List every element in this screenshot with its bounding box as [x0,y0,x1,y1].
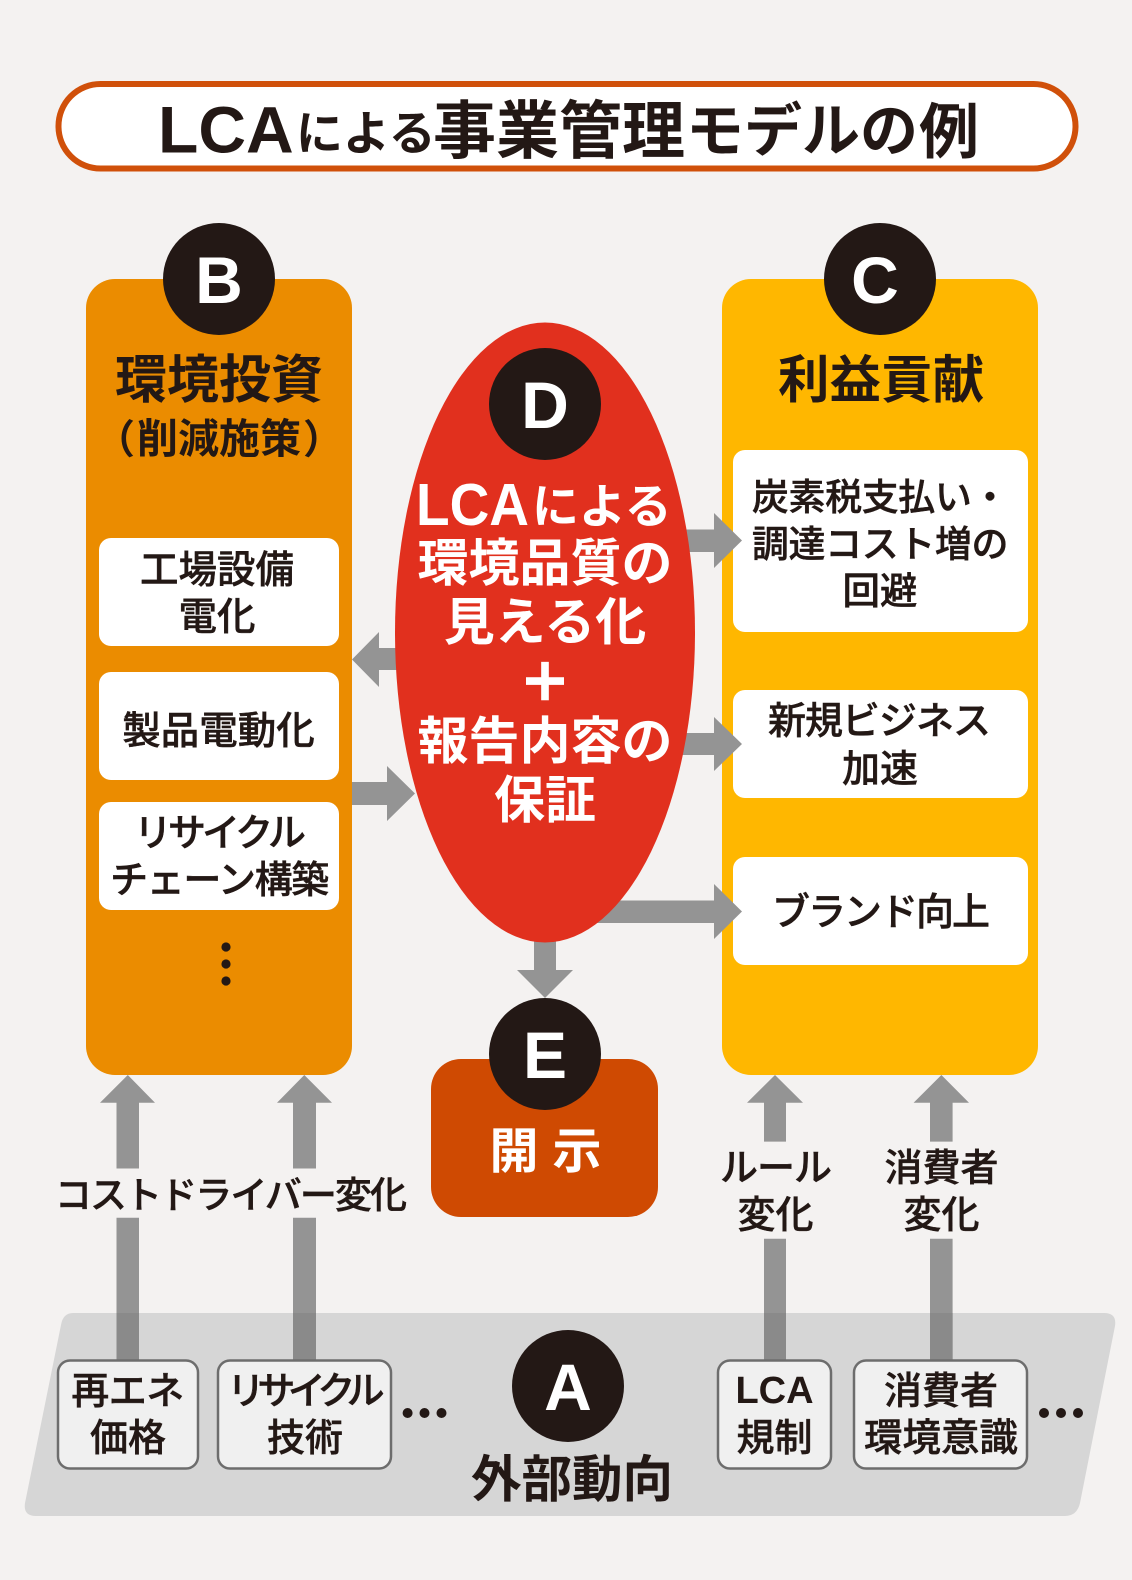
arrow: renewable price to B [100,1075,155,1360]
label: disclosure: 開 [489,1125,539,1179]
text: D body: 報告内容の [417,713,673,770]
heading: profit contribution: 利益貢献 [778,351,984,409]
item: product electrification [99,672,339,780]
arrow shafts over base [116,1313,953,1360]
text: D body: 環境品質の [417,535,673,592]
text: D body: LCA [416,472,529,538]
arrow: D to brand [560,884,742,939]
badge B [163,223,275,335]
subheading: reduction measures [95,416,343,462]
label: disclosure: 示 [552,1125,602,1179]
item: product electrification: 製品電動化 [122,710,315,753]
badge C [824,223,936,335]
item: factory equipment electrification: 工場設備 [140,549,294,592]
box: recycling technology [218,1360,391,1468]
item: factory equipment electrification: 電化 [178,596,256,639]
badge D [489,348,601,460]
label: disclosure [489,1125,602,1179]
arrow: D to new business [660,717,742,771]
panel C: profit contribution [722,279,1038,1075]
label: consumer change [884,1148,999,1237]
arrow: D to E [517,920,573,998]
item: brand improvement [733,857,1028,965]
badge E [489,998,601,1110]
item: recycling chain: チェーン構築 [110,860,328,902]
item: factory equipment electrification [99,538,339,646]
label: rule change: ルール [720,1148,831,1190]
text: D body: ＋ [520,655,570,711]
badge C: C [851,243,899,317]
box: consumer environmental awareness: 環境意識 [864,1417,1018,1460]
item: new business [733,690,1028,798]
title: 事業管理 [433,97,685,167]
more dots left [403,1408,446,1418]
arrow: consumer to C [914,1075,969,1360]
item: new business: 新規ビジネス [768,701,990,743]
box: LCA regulation: LCA [735,1370,814,1412]
more dots vertical [221,942,231,986]
box: recycling technology: 技術 [267,1418,343,1460]
box: LCA regulation: 規制 [736,1418,813,1460]
item: carbon tax avoidance: 炭素税支払い・ [752,477,1008,518]
more dots right [1039,1408,1083,1418]
badge D: D [521,368,569,442]
label: rule change [720,1148,831,1237]
subheading: reduction measures: ） [303,418,343,462]
title [58,84,1076,168]
text: D body [416,472,673,829]
item: carbon tax avoidance: 回避 [842,570,918,612]
box: renewable energy price [58,1360,198,1468]
label: rule change: 変化 [737,1195,814,1237]
arrow: D to carbon tax [660,513,742,568]
subheading: reduction measures: （ [95,418,135,462]
box: LCA regulation [718,1360,831,1468]
arrows: external trends upward [100,1075,969,1360]
box: renewable energy price: 再エネ [71,1371,184,1413]
item: carbon tax avoidance: 調達コスト増の [752,524,1008,565]
badge B: B [195,243,243,317]
badge E: E [523,1018,567,1092]
text: D body: 見える化 [444,594,646,651]
panel D: visualization ellipse [395,322,695,942]
panel: external trends base [25,1313,1115,1516]
arrow: D to B [352,632,420,687]
item: recycling chain: リサイクル [134,813,305,855]
heading: environmental investment: 環境投資 [115,352,323,410]
arrow: B to D [352,766,415,821]
subheading: reduction measures: 削減施策 [137,416,301,462]
badge A: A [544,1350,592,1424]
item: carbon tax avoidance [733,450,1028,632]
arrow: recycling tech to B [277,1075,332,1360]
title: 例 [919,99,979,166]
title: LCA [158,93,294,167]
arrow: LCA rule to C [747,1075,803,1360]
item: recycling chain [99,802,339,910]
box: consumer environmental awareness: 消費者 [884,1371,998,1413]
title: による [296,107,436,160]
text: D body: による [532,480,672,533]
label: cost driver change: コストドライバー変化 [55,1175,406,1216]
item: new business: 加速 [842,749,918,791]
box: renewable energy price: 価格 [90,1418,166,1460]
text: D body: 保証 [494,772,596,829]
label: consumer change: 消費者 [884,1148,999,1190]
panel E: disclosure [431,998,658,1217]
box: consumer environmental awareness [854,1360,1027,1468]
heading: external trends: 外部動向 [471,1451,673,1508]
title: モデルの [686,99,918,164]
badge A [512,1330,624,1442]
panel B: environmental investment [86,279,352,1075]
item: brand improvement: ブランド向上 [772,892,989,934]
box: recycling technology: リサイクル [227,1371,384,1413]
label: consumer change: 変化 [903,1195,980,1237]
